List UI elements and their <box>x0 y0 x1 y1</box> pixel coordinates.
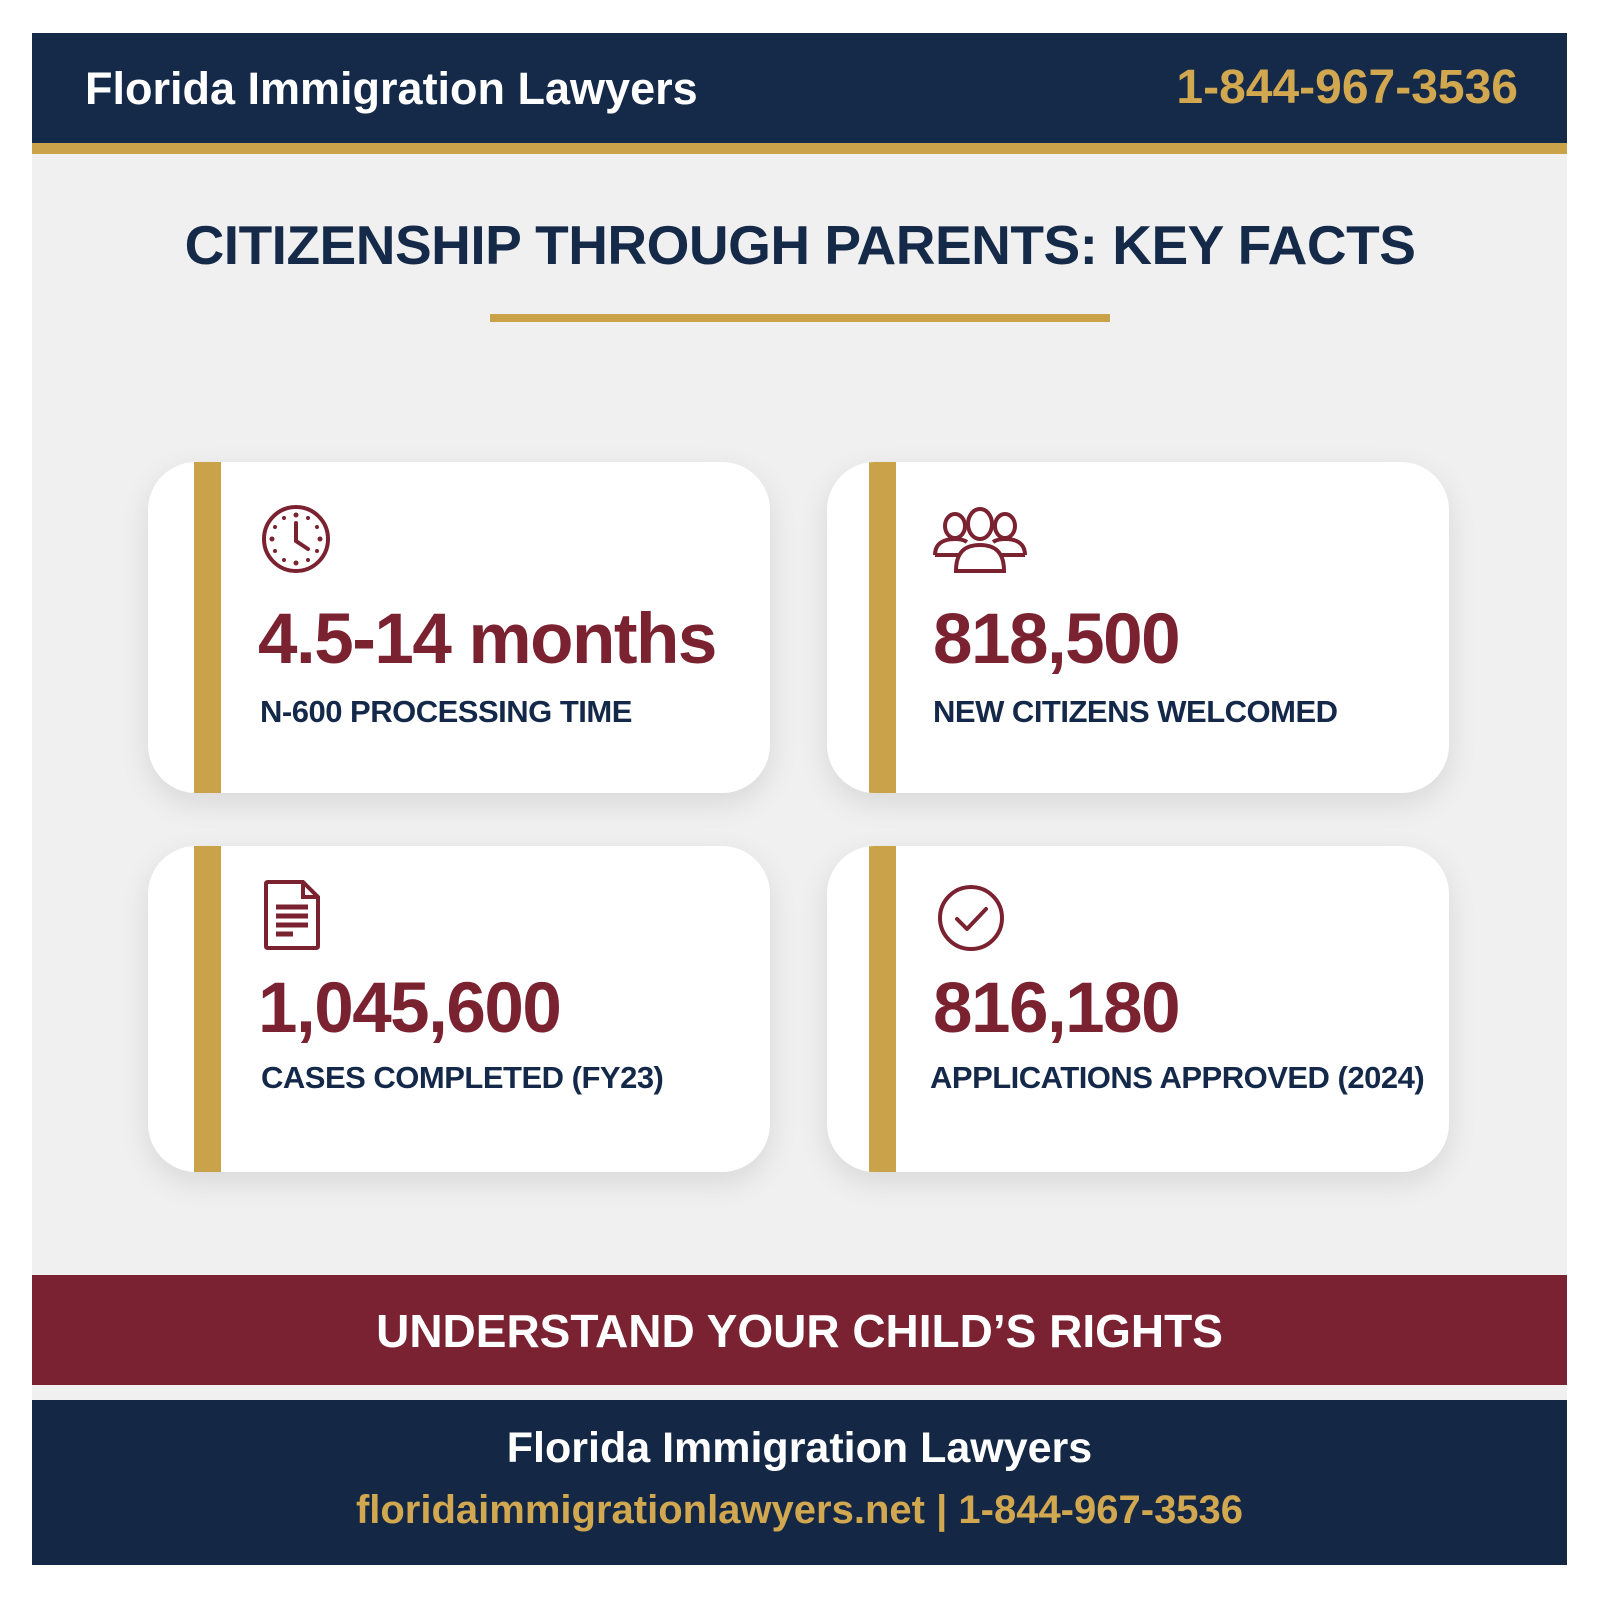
callout banner: UNDERSTAND YOUR CHILD’S RIGHTS <box>376 1305 1223 1357</box>
title underline <box>490 314 1110 322</box>
callout banner <box>32 1275 1567 1385</box>
card: new citizens <box>827 462 1449 793</box>
card: applications approved <box>827 846 1449 1172</box>
stat number: 818,500 <box>933 600 1179 679</box>
icon: people <box>933 507 1027 573</box>
footer contact: floridaimmigrationlawyers.net | 1-844-967-3536 <box>356 1488 1243 1532</box>
card: cases completed <box>148 846 770 1172</box>
stat label: NEW CITIZENS WELCOMED <box>933 694 1338 729</box>
stat label: N-600 PROCESSING TIME <box>260 694 632 729</box>
footer <box>32 1400 1567 1565</box>
icon: check circle <box>938 885 1004 951</box>
stat label: CASES COMPLETED (FY23) <box>261 1060 663 1095</box>
stat number: 1,045,600 <box>258 969 560 1048</box>
stat number: 816,180 <box>933 969 1179 1048</box>
stat number: 4.5-14 months <box>258 600 716 679</box>
header bar <box>32 33 1567 154</box>
footer brand: Florida Immigration Lawyers <box>507 1424 1092 1472</box>
header phone: 1-844-967-3536 <box>1176 61 1518 114</box>
stat label: APPLICATIONS APPROVED (2024) <box>930 1060 1424 1095</box>
icon: document <box>264 880 320 950</box>
icon: clock <box>262 505 330 573</box>
title: CITIZENSHIP THROUGH PARENTS: KEY FACTS <box>185 214 1415 276</box>
header brand: Florida Immigration Lawyers <box>85 63 698 114</box>
card: processing time <box>148 462 770 793</box>
